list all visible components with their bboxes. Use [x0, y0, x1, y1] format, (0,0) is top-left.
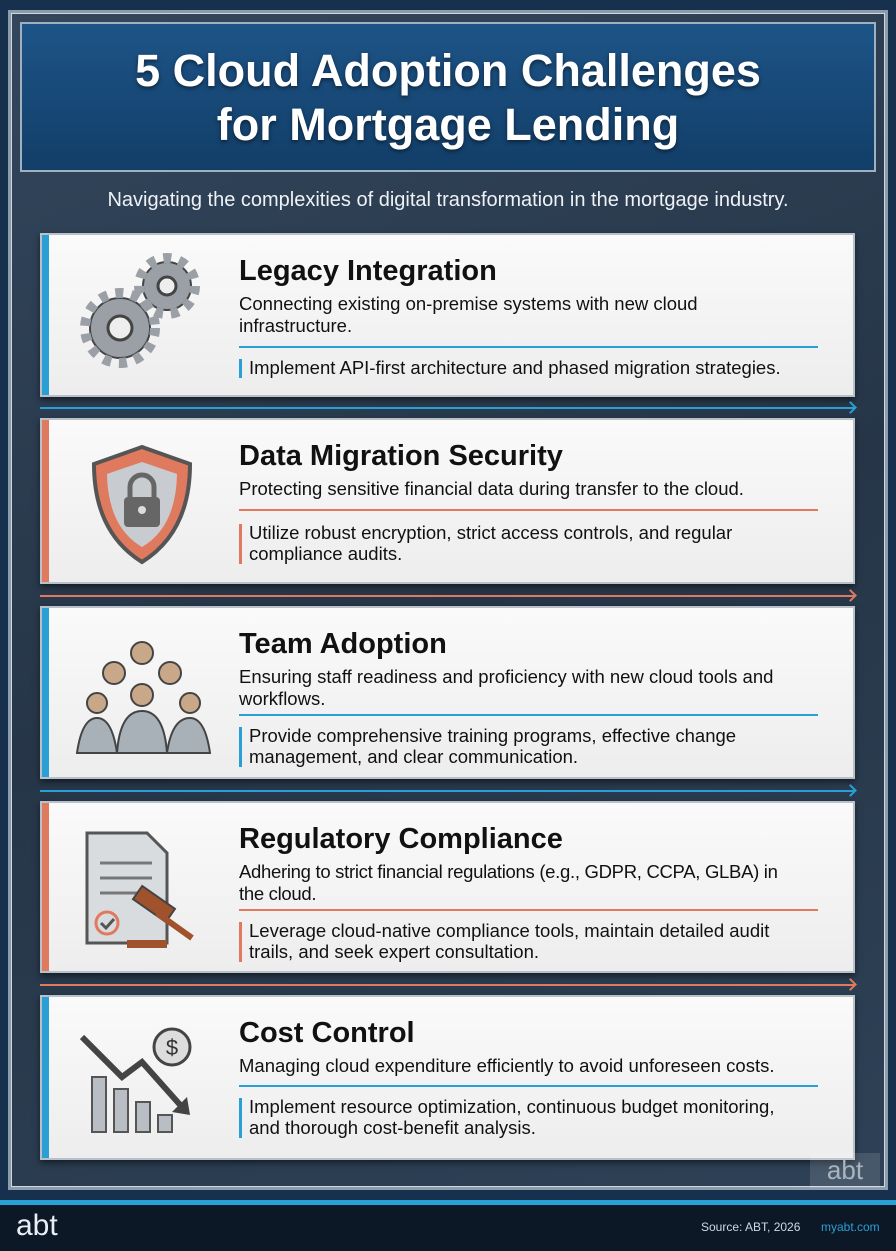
icon: falling cost chart: [80, 1028, 192, 1133]
text: description: Ensuring staff readiness and proficiency with new cloud tools and workflows.: [239, 666, 773, 709]
watermark logo: abt: [827, 1155, 863, 1185]
panel: regulatory compliance: [40, 801, 855, 973]
text: description: Connecting existing on-premise systems with new cloud infrastructure.: [239, 293, 698, 336]
footer: myabt.com: [821, 1220, 880, 1234]
logo: abt: [16, 1209, 58, 1242]
icon: falling cost chart: $: [166, 1035, 178, 1060]
subtitle: Navigating the complexities of digital transformation in the mortgage industry.: [107, 189, 789, 211]
heading: Legacy Integration: [239, 255, 497, 287]
title: for Mortgage Lending: [217, 99, 679, 150]
text: solution: Provide comprehensive training programs, effective change management, and clear communication.: [249, 725, 736, 767]
text: description: Adhering to strict financial regulations (e.g., GDPR, CCPA, GLBA) in the cloud.: [239, 861, 778, 904]
arrow: [40, 790, 855, 792]
text: solution: Utilize robust encryption, strict access controls, and regular compliance audits.: [249, 522, 732, 564]
title: [20, 22, 876, 172]
heading: Data Migration Security: [239, 440, 563, 472]
arrow: [40, 595, 855, 597]
icon: shield lock: [92, 444, 192, 564]
text: description: Managing cloud expenditure efficiently to avoid unforeseen costs.: [239, 1055, 774, 1076]
source text: Source: ABT, 2026: [701, 1220, 800, 1234]
text: solution: Implement API-first architecture and phased migration strategies.: [249, 357, 781, 378]
heading: Team Adoption: [239, 628, 447, 660]
panel: legacy integration: [40, 233, 855, 397]
watermark logo: [810, 1153, 880, 1188]
icon: team: [76, 641, 212, 754]
panel: data migration security: [40, 418, 855, 584]
title: 5 Cloud Adoption Challenges: [135, 45, 761, 96]
text: solution: Leverage cloud-native compliance tools, maintain detailed audit trails, and seek expert consultation.: [249, 920, 769, 962]
icon: document gavel: [86, 832, 194, 948]
arrow: [40, 984, 855, 986]
text: solution: Implement resource optimization, continuous budget monitoring, and thorough cost-benefit analysis.: [249, 1096, 774, 1138]
panel: cost control: [40, 995, 855, 1160]
text: description: Protecting sensitive financial data during transfer to the cloud.: [239, 478, 744, 499]
heading: Regulatory Compliance: [239, 823, 563, 855]
panel: team adoption: [40, 606, 855, 779]
heading: Cost Control: [239, 1017, 415, 1049]
icon: gears: [80, 253, 200, 368]
footer: [0, 1200, 896, 1251]
arrow: [40, 407, 855, 409]
